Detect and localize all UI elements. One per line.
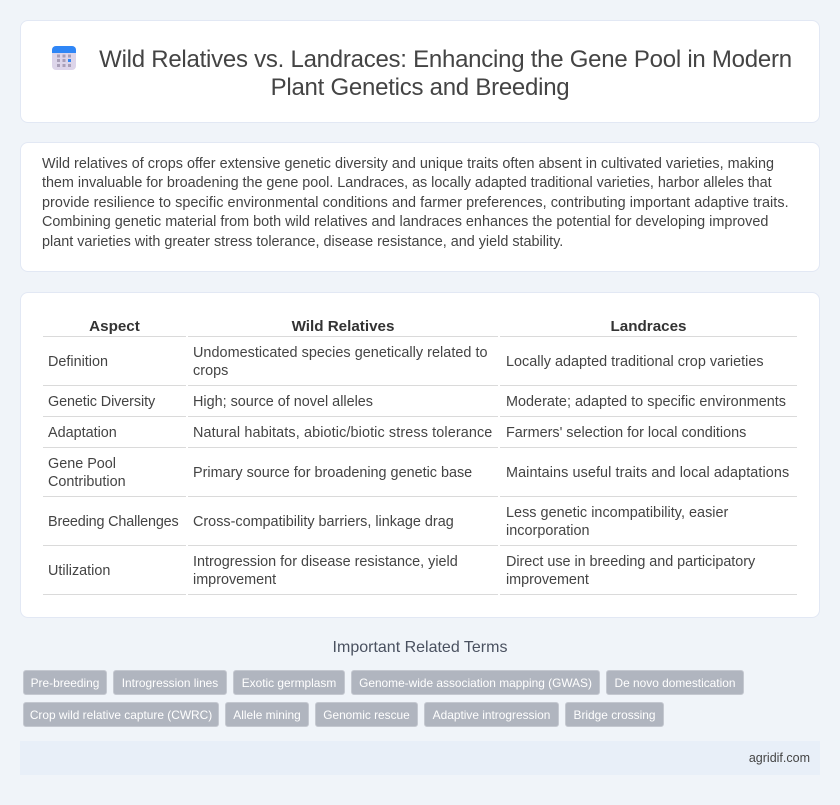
comparison table: Genetic Diversity bbox=[48, 394, 155, 410]
related terms tags: Pre-breeding bbox=[31, 676, 99, 690]
comparison table card bbox=[20, 292, 820, 618]
related terms tags: De novo domestication bbox=[615, 676, 735, 690]
related terms tags: Bridge crossing bbox=[574, 708, 655, 722]
related terms tags: Allele mining bbox=[233, 708, 301, 722]
related terms tags: Genome-wide association mapping (GWAS) bbox=[359, 676, 592, 690]
icon: calendar bbox=[52, 46, 76, 70]
comparison table: Natural habitats, abiotic/biotic stress tolerance bbox=[193, 425, 492, 441]
comparison table: Moderate; adapted to specific environments bbox=[506, 394, 786, 410]
heading: Plant Genetics and Breeding bbox=[271, 74, 569, 101]
related terms tags: Adaptive introgression bbox=[433, 708, 550, 722]
comparison table: Undomesticated species genetically related to bbox=[193, 345, 488, 361]
comparison table: improvement bbox=[193, 572, 276, 588]
summary text: Wild relatives of crops offer extensive genetic diversity and unique traits often absent in cultivated varieties, making bbox=[42, 156, 774, 172]
comparison table: Breeding Challenges bbox=[48, 514, 179, 530]
comparison table: improvement bbox=[506, 572, 589, 588]
comparison table: Maintains useful traits and local adaptations bbox=[506, 465, 789, 481]
summary text: Combining genetic material from both wild relatives and landraces enhances the potential for developing improved bbox=[42, 214, 768, 230]
heading bbox=[99, 46, 792, 101]
footer source: agridif.com bbox=[749, 751, 810, 765]
comparison table: Introgression for disease resistance, yield bbox=[193, 554, 458, 570]
comparison table: Adaptation bbox=[48, 425, 117, 441]
comparison table: Farmers' selection for local conditions bbox=[506, 425, 746, 441]
title card bbox=[20, 20, 820, 123]
comparison table: Utilization bbox=[48, 563, 110, 579]
comparison table: incorporation bbox=[506, 523, 590, 539]
comparison table: Aspect bbox=[89, 318, 140, 335]
comparison table: Less genetic incompatibility, easier bbox=[506, 505, 728, 521]
summary text bbox=[42, 156, 789, 250]
footer bar bbox=[20, 741, 820, 775]
comparison table: Contribution bbox=[48, 474, 126, 490]
related terms tags: Crop wild relative capture (CWRC) bbox=[30, 708, 212, 722]
related terms tags: Genomic rescue bbox=[323, 708, 410, 722]
comparison table: Wild Relatives bbox=[292, 318, 394, 335]
summary text: them invaluable for broadening the gene pool. Landraces, as locally adapted traditional varieties, harbor alleles that bbox=[42, 175, 772, 191]
comparison table: Locally adapted traditional crop varieties bbox=[506, 354, 764, 370]
related terms heading: Important Related Terms bbox=[333, 639, 507, 656]
comparison table: Definition bbox=[48, 354, 108, 370]
heading: Wild Relatives vs. Landraces: Enhancing the Gene Pool in Modern bbox=[99, 46, 792, 73]
comparison table: Landraces bbox=[610, 318, 686, 335]
related terms tags bbox=[23, 670, 744, 727]
comparison table: Cross-compatibility barriers, linkage drag bbox=[193, 514, 454, 530]
related terms tags: Exotic germplasm bbox=[242, 676, 336, 690]
comparison table bbox=[43, 318, 797, 595]
summary card bbox=[20, 142, 820, 272]
comparison table: Direct use in breeding and participatory bbox=[506, 554, 755, 570]
comparison table: High; source of novel alleles bbox=[193, 394, 373, 410]
comparison table: Primary source for broadening genetic base bbox=[193, 465, 472, 481]
related terms tags: Introgression lines bbox=[122, 676, 218, 690]
comparison table: crops bbox=[193, 363, 228, 379]
comparison table: Gene Pool bbox=[48, 456, 116, 472]
summary text: provide resilience to specific environmental conditions and farmer preferences, contributing important adaptive traits. bbox=[42, 195, 789, 211]
summary text: plant varieties with greater stress tolerance, disease resistance, and yield stability. bbox=[42, 234, 563, 250]
